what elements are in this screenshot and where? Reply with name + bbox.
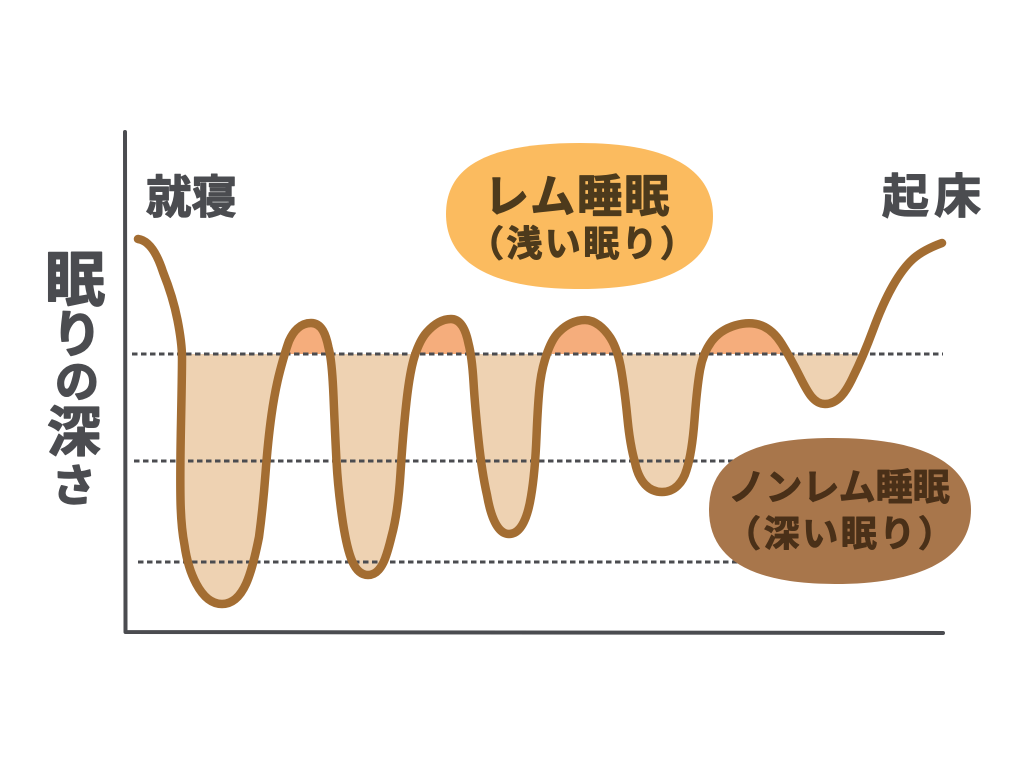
y axis title: depth of sleep: 深: [47, 403, 101, 463]
callout: REM sleep: （浅い眠り）: [468, 223, 698, 264]
sleep depth chart infographic: [48, 130, 981, 635]
y axis title: depth of sleep: の: [55, 358, 99, 407]
y axis title: depth of sleep: さ: [52, 462, 96, 511]
callout: REM sleep: [446, 143, 713, 289]
y axis title: depth of sleep: り: [52, 307, 102, 363]
label: bedtime: 就寝: [146, 172, 237, 223]
sleep depth curve: [138, 239, 942, 604]
REM shaded area: [290, 323, 782, 354]
callout: non-REM sleep: （深い眠り）: [725, 513, 957, 554]
callout: REM sleep: レム睡眠: [484, 171, 671, 222]
callout: non-REM sleep: [709, 438, 971, 584]
y axis title: depth of sleep: 眠: [45, 247, 105, 314]
non-REM shaded area: [184, 354, 859, 600]
label: wake up: 起床: [882, 170, 986, 223]
callout: non-REM sleep: ノンレム睡眠: [728, 467, 950, 508]
dotted depth guide lines: [132, 354, 943, 562]
chart axes: [125, 132, 943, 633]
y axis title: depth of sleep: [45, 247, 105, 511]
